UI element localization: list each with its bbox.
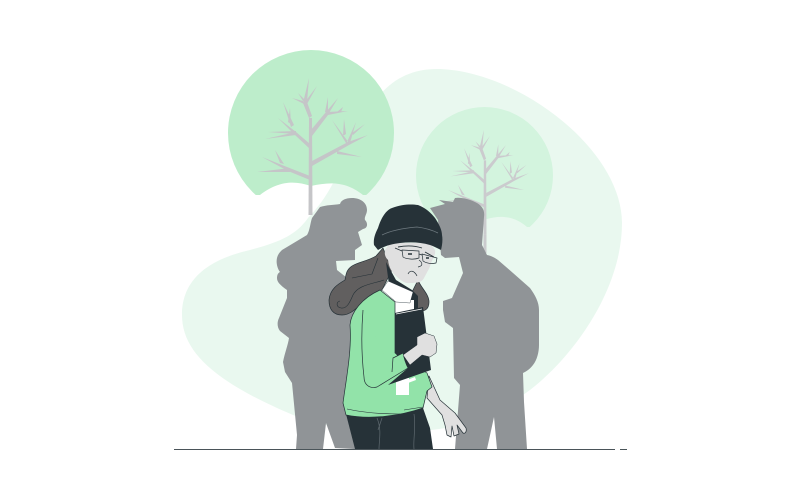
large tree branches (257, 78, 368, 215)
sweater (343, 290, 432, 417)
book page edge (396, 309, 422, 314)
small tree (416, 107, 553, 253)
glasses (395, 248, 437, 263)
brows (398, 246, 434, 257)
dark hair by the neck (386, 262, 418, 310)
beanie (374, 204, 442, 250)
small tree branches (444, 130, 529, 253)
hair behind left (329, 248, 392, 315)
girl (329, 204, 466, 449)
collar (382, 281, 413, 303)
hanging arm (427, 376, 466, 437)
nose and mouth (408, 260, 422, 276)
large tree (228, 50, 394, 216)
trousers (346, 408, 433, 449)
ground line (174, 448, 627, 450)
beanie fold (382, 227, 438, 235)
hair behind right (408, 280, 429, 311)
eyes (408, 254, 429, 258)
face (385, 243, 437, 283)
background blob (182, 69, 622, 432)
silhouette: woman (277, 198, 400, 449)
bookmark (396, 378, 409, 395)
sweater hem line (347, 407, 423, 414)
trouser seams (377, 414, 415, 449)
small tree foliage circle (416, 107, 553, 227)
sleeve (362, 310, 408, 388)
ground dash (620, 448, 627, 450)
hair strands (337, 258, 384, 308)
shirt (392, 300, 414, 316)
bookmark tab (407, 377, 416, 383)
silhouette: man (430, 198, 539, 449)
large tree foliage circle (228, 50, 394, 195)
book (388, 307, 431, 385)
hand on book (403, 333, 437, 365)
